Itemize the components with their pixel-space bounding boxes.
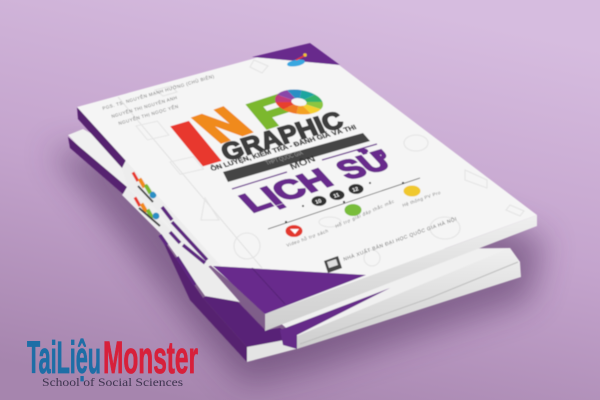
timeline captions: Hỗ trợ giải đáp thắc mắc bbox=[334, 197, 395, 229]
banner bbox=[223, 133, 370, 182]
banner text: THPT QUỐC GIA bbox=[263, 147, 305, 167]
publisher: NHÀ XUẤT BẢN ĐẠI HỌC QUỐC GIA HÀ NỘI bbox=[342, 215, 457, 263]
watermark tagline: School of Social Sciences bbox=[42, 375, 183, 389]
colour wheel O bbox=[269, 87, 329, 117]
cover top-right purple corner bbox=[252, 43, 340, 65]
grade badges: 12 bbox=[351, 186, 360, 194]
icon: support bbox=[344, 204, 362, 216]
book stack bbox=[68, 43, 537, 362]
grade badges: 10 bbox=[314, 198, 323, 206]
authors: NGUYỄN THỊ NGỌC YẾN bbox=[117, 103, 179, 126]
timeline captions: Hệ thống PV Pro bbox=[402, 190, 441, 208]
GRAPHIC: GRAPHIC bbox=[217, 106, 348, 166]
publisher mark top bbox=[287, 53, 307, 68]
authors: NGUYỄN THỊ NGUYÊN ANH bbox=[110, 93, 178, 119]
grade badges bbox=[302, 182, 371, 207]
timeline captions: Video hỗ trợ sách bbox=[285, 227, 329, 248]
book shadow bbox=[50, 150, 545, 385]
icon: system bbox=[404, 186, 420, 196]
authors bbox=[101, 72, 215, 126]
spine mini logo upper bbox=[132, 172, 156, 202]
watermark logo: TaiLiệu bbox=[27, 332, 101, 383]
middle book spine bbox=[122, 188, 240, 302]
subtitle: ÔN LUYỆN, KIỂM TRA - ĐÁNH GIÁ VÀ THI bbox=[208, 123, 358, 173]
grade badges: 11 bbox=[333, 192, 341, 200]
icon: video bbox=[286, 225, 302, 237]
publisher bbox=[324, 215, 457, 273]
top book page block and spine bbox=[77, 107, 537, 331]
subject: LỊCH SỬ bbox=[232, 145, 401, 218]
subject: LỊCH SỬ: SỬ bbox=[328, 145, 401, 185]
middle book bbox=[68, 129, 521, 349]
top book cover bbox=[77, 43, 537, 314]
title: INFO: F bbox=[239, 88, 304, 136]
title: INFO: N bbox=[183, 100, 263, 151]
timeline captions bbox=[285, 190, 441, 248]
watermark logo: Monster bbox=[103, 332, 198, 383]
spine mini logo lower bbox=[134, 197, 160, 226]
subject: MÔN bbox=[232, 144, 377, 189]
authors: PGS. TS. NGUYỄN MẠNH HƯỞNG (CHỦ BIÊN) bbox=[101, 72, 215, 111]
subject: LỊCH SỬ: LỊCH bbox=[232, 163, 340, 218]
title: INFO bbox=[156, 88, 304, 179]
subject: MÔN: MÔN bbox=[287, 153, 317, 172]
spine purple title bars bbox=[160, 207, 207, 285]
bottom book bbox=[160, 235, 296, 362]
timeline bbox=[268, 178, 420, 237]
faint outline icons bbox=[136, 60, 524, 266]
title: INFO: I bbox=[156, 108, 236, 179]
cover bottom purple corner bbox=[213, 266, 366, 314]
